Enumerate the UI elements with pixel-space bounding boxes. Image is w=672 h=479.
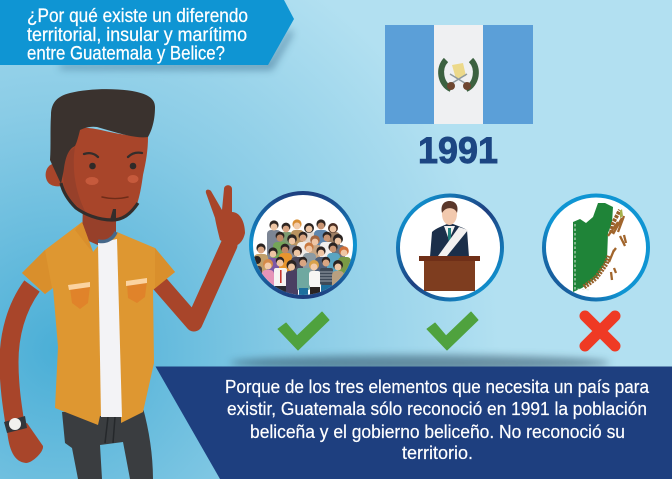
- victory hand: [206, 185, 245, 246]
- ear: [46, 164, 62, 186]
- cross mark: [585, 316, 615, 346]
- panel shadow: [230, 355, 610, 371]
- front row: [254, 256, 344, 295]
- face shade: [63, 147, 86, 213]
- title banner: ¿Por qué existe un diferendo: [27, 6, 248, 27]
- eyes and brows: [84, 153, 142, 169]
- face: [61, 128, 148, 220]
- banner shadow: [60, 28, 293, 70]
- pockets: [70, 286, 90, 309]
- sleeves shade: [22, 222, 175, 294]
- right arm: [161, 245, 229, 323]
- year 1991: 1991: [418, 130, 498, 171]
- explanation panel: [156, 366, 672, 479]
- explanation panel: territorio.: [402, 442, 473, 463]
- cheeks: [86, 177, 98, 185]
- back row: [267, 219, 340, 260]
- title banner: [0, 0, 294, 65]
- shirt: [22, 222, 175, 425]
- title banner: territorial, insular y marítimo: [27, 25, 247, 46]
- wristwatch: [4, 416, 27, 433]
- circle: territory: [544, 196, 648, 300]
- neck: [82, 205, 116, 246]
- third row: [254, 242, 351, 280]
- man figure: [4, 89, 245, 479]
- second row: [273, 232, 345, 258]
- title banner: entre Guatemala y Belice?: [27, 44, 225, 64]
- Guatemala flag: [385, 25, 533, 124]
- Belize map: [573, 203, 626, 292]
- collar: [98, 232, 116, 242]
- hair: [50, 89, 155, 184]
- podium: [419, 256, 480, 291]
- check mark 2: [427, 312, 478, 350]
- fist: [7, 423, 43, 463]
- flag emblem: [441, 60, 476, 90]
- trousers: [62, 408, 153, 479]
- beard: [61, 183, 138, 220]
- explanation panel: Porque de los tres elementos que necesita un país para: [225, 376, 650, 397]
- circle: people: [250, 193, 355, 300]
- crowd: [250, 219, 351, 300]
- president figure: [430, 201, 469, 257]
- white t-shirt: [98, 239, 122, 417]
- left arm: [9, 286, 32, 424]
- circle: government: [398, 196, 502, 300]
- mouth: [102, 197, 128, 198]
- check mark 1: [278, 312, 329, 350]
- explanation panel: existir, Guatemala sólo reconoció en 1991 la población: [227, 398, 647, 419]
- explanation panel: beliceña y el gobierno beliceño. No reconoció su: [250, 421, 625, 442]
